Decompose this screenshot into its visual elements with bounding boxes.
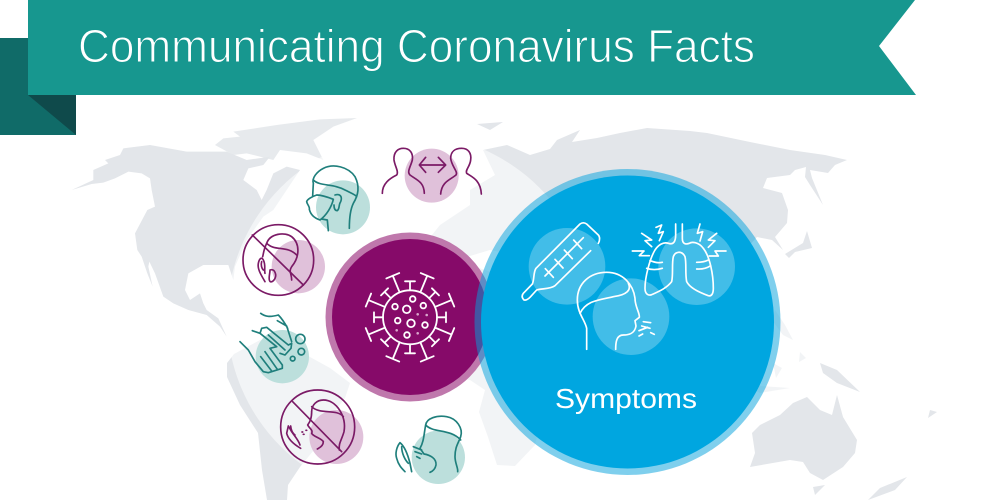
title: Communicating Coronavirus Facts [78, 20, 755, 72]
icon: thermometer [522, 223, 605, 305]
map: New Guinea [820, 363, 860, 392]
icon: lungs [632, 224, 735, 305]
icon: coronavirus [366, 273, 454, 362]
map: South America [227, 340, 350, 500]
map: Japan [785, 231, 812, 258]
map: Africa [410, 265, 560, 466]
map: Philippines and Indonesia [745, 310, 806, 393]
ribbon fold backing [0, 38, 76, 135]
icon: coughing head [577, 272, 669, 355]
icon: social distancing [382, 148, 481, 203]
virus circle [326, 232, 494, 402]
icon: face mask [307, 166, 370, 234]
world map background [72, 118, 937, 500]
map: North America [72, 145, 300, 337]
map: Australia [750, 395, 857, 480]
symptoms circle [474, 169, 780, 475]
halo circle over the map [227, 134, 593, 500]
map: Tasmania and New Zealand [813, 410, 937, 500]
map: Eurasia [420, 128, 847, 300]
map: Svalbard [477, 122, 503, 130]
symptoms label: Symptoms [555, 383, 697, 414]
map: Arctic islands [215, 118, 357, 160]
title banner [28, 0, 916, 95]
icon: cough into hand [396, 416, 465, 484]
icon: do not touch face [243, 225, 325, 295]
icon: hand washing [240, 313, 309, 383]
icon: do not touch mouth [281, 390, 363, 464]
